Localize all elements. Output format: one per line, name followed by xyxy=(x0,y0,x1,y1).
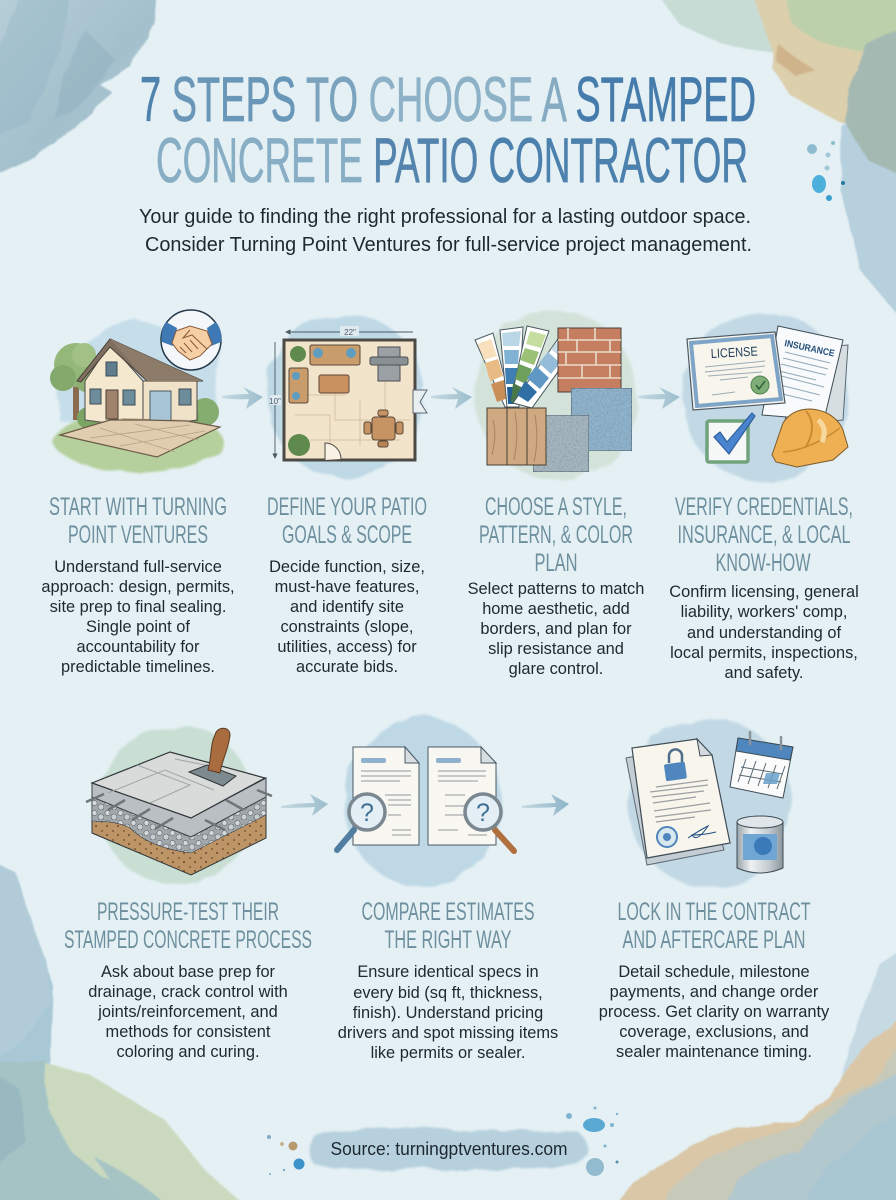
heading: STAMPED CONCRETE PROCESS xyxy=(64,926,312,954)
source badge xyxy=(310,1129,587,1170)
body: Ensure identical specs in xyxy=(357,963,539,981)
body: payments, and change order xyxy=(610,983,819,1001)
body xyxy=(269,558,425,676)
body: glare control. xyxy=(509,660,603,678)
step 4: icon credentials: INSURANCE xyxy=(783,338,836,360)
step 5: icon concrete cross-section xyxy=(86,725,272,885)
watercolor corner: bottom right xyxy=(610,945,896,1200)
arrow 2 xyxy=(431,387,472,409)
arrow 3 xyxy=(638,387,680,409)
heading xyxy=(675,493,853,577)
arrow 5 xyxy=(281,794,328,816)
title xyxy=(140,65,756,196)
step 4 text xyxy=(669,493,859,682)
body: every bid (sq ft, thickness, xyxy=(353,984,543,1002)
heading xyxy=(362,898,534,954)
body: Select patterns to match xyxy=(468,580,644,598)
body: must-have features, xyxy=(275,578,419,596)
watercolor corner: top right xyxy=(655,0,896,325)
body: methods for consistent xyxy=(106,1023,271,1041)
step 3 text xyxy=(468,493,644,678)
body xyxy=(41,558,235,676)
heading: KNOW-HOW xyxy=(716,549,811,577)
step 6 text xyxy=(338,898,558,1062)
body: drainage, crack control with xyxy=(88,983,288,1001)
title: 7 STEPS TO CHOOSE A STAMPED xyxy=(140,65,756,135)
heading: PRESSURE-TEST THEIR xyxy=(97,898,279,926)
body xyxy=(468,580,644,678)
body: constraints (slope, xyxy=(280,618,414,636)
heading: COMPARE ESTIMATES xyxy=(362,898,534,926)
body xyxy=(88,963,288,1061)
body: finish). Understand pricing xyxy=(353,1004,543,1022)
arrow 6 xyxy=(522,794,569,816)
subtitle: Your guide to finding the right professional for a lasting outdoor space. xyxy=(139,206,751,228)
step 1: icon house and handshake xyxy=(50,310,221,472)
heading: PLAN xyxy=(534,549,578,577)
heading xyxy=(64,898,312,954)
heading: GOALS & SCOPE xyxy=(282,521,412,549)
body: liability, workers' comp, xyxy=(681,603,847,621)
heading: POINT VENTURES xyxy=(68,521,208,549)
splatters around source xyxy=(267,1106,618,1176)
step 6: icon comparing estimates: ? xyxy=(360,799,374,827)
step 4: icon credentials xyxy=(682,312,848,482)
body: Ask about base prep for xyxy=(101,963,276,981)
body: home aesthetic, add xyxy=(482,600,630,618)
body: Detail schedule, milestone xyxy=(618,963,810,981)
body: accountability for xyxy=(76,638,200,656)
body: Single point of xyxy=(86,618,190,636)
body: site prep to final sealing. xyxy=(50,598,226,616)
watercolor corner: bottom left xyxy=(0,860,250,1200)
heading: CHOOSE A STYLE, xyxy=(485,493,627,521)
body: and identify site xyxy=(290,598,404,616)
body: coloring and curing. xyxy=(116,1043,260,1061)
heading: PATTERN, & COLOR xyxy=(479,521,633,549)
step 5 text xyxy=(64,898,312,1061)
body: and understanding of xyxy=(687,624,841,642)
body xyxy=(599,963,830,1061)
body: sealer maintenance timing. xyxy=(616,1043,812,1061)
body: Confirm licensing, general xyxy=(669,583,859,601)
body: predictable timelines. xyxy=(61,658,215,676)
heading: THE RIGHT WAY xyxy=(384,926,512,954)
heading xyxy=(479,493,633,577)
body: drivers and spot missing items xyxy=(338,1024,558,1042)
body: approach: design, permits, xyxy=(41,578,235,596)
step 6: icon comparing estimates: ? xyxy=(476,799,490,827)
body: utilities, access) for xyxy=(277,638,417,656)
body: Understand full-service xyxy=(54,558,222,576)
source badge: Source: turningptventures.com xyxy=(330,1138,568,1159)
body: like permits or sealer. xyxy=(371,1044,525,1062)
step 2 text xyxy=(267,493,427,676)
step 2: icon floor plan: 22" xyxy=(344,328,356,337)
body xyxy=(338,963,558,1062)
arrow 1 xyxy=(222,387,263,409)
body: local permits, inspections, xyxy=(670,644,858,662)
body: Decide function, size, xyxy=(269,558,425,576)
body: borders, and plan for xyxy=(480,620,632,638)
step 4: icon credentials: LICENSE xyxy=(710,344,758,361)
subtitle xyxy=(139,206,752,256)
body: slip resistance and xyxy=(488,640,624,658)
paint splatters top right xyxy=(807,141,845,201)
body: joints/reinforcement, and xyxy=(97,1003,278,1021)
heading xyxy=(267,493,427,549)
body xyxy=(669,583,859,682)
step 3: icon swatches and samples xyxy=(475,310,637,480)
step 2: icon floor plan xyxy=(267,314,427,478)
heading xyxy=(49,493,227,549)
step 1 text xyxy=(41,493,235,676)
body: process. Get clarity on warranty xyxy=(599,1003,830,1021)
step 7: icon contract and aftercare xyxy=(626,719,793,887)
subtitle: Consider Turning Point Ventures for full-service project management. xyxy=(145,234,752,256)
heading: START WITH TURNING xyxy=(49,493,227,521)
body: coverage, exclusions, and xyxy=(619,1023,809,1041)
heading: DEFINE YOUR PATIO xyxy=(267,493,427,521)
step 2: icon floor plan: 10" xyxy=(269,397,281,406)
heading xyxy=(618,898,810,954)
step 7 text xyxy=(599,898,830,1061)
body: and safety. xyxy=(725,664,803,682)
body: accurate bids. xyxy=(296,658,398,676)
watercolor corner: top left xyxy=(0,0,155,178)
step 6: icon comparing estimates xyxy=(337,717,514,887)
